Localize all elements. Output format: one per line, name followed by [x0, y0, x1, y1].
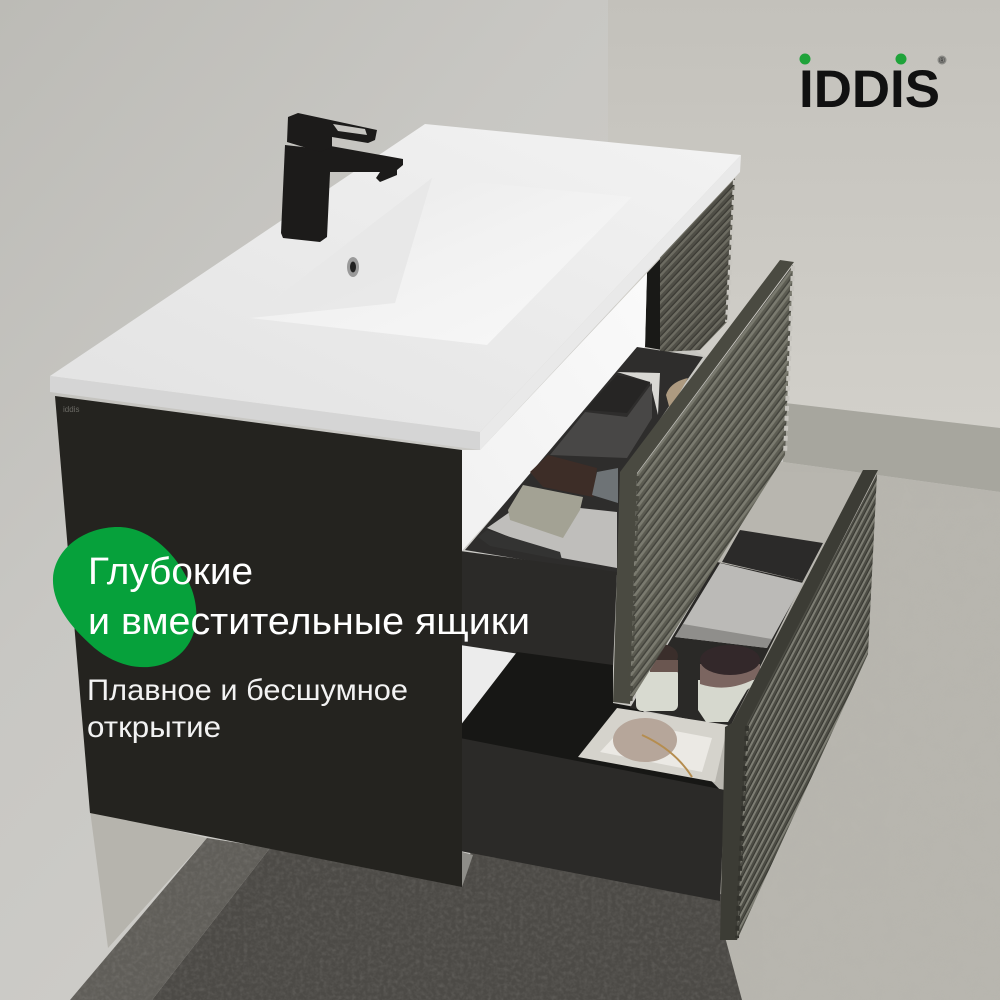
- dark item: [478, 530, 562, 560]
- white towel: [487, 505, 617, 568]
- drain: [347, 257, 359, 277]
- registered mark: [938, 56, 946, 65]
- basin left wall: [250, 178, 432, 318]
- top drawer ribbed front: [613, 260, 794, 704]
- dark floor texture: [70, 838, 742, 1000]
- countertop surface: [50, 124, 741, 432]
- ribbed surface: [660, 178, 735, 352]
- bottom drawer side: [460, 738, 725, 901]
- drawer interior: [465, 347, 703, 575]
- scalloped left edge: [737, 726, 747, 938]
- floor stone texture: [700, 462, 1000, 1000]
- ribbed surface: [630, 265, 793, 702]
- faucet handle: [287, 113, 377, 152]
- tray inner: [600, 722, 712, 772]
- bottom drawer ribbed front: [720, 470, 878, 940]
- string: [642, 735, 692, 777]
- wall shadow under cabinet: [90, 810, 207, 948]
- front edge: [720, 470, 878, 940]
- green dot left: [800, 54, 810, 64]
- ceramic washbasin: [50, 124, 741, 450]
- bin opening: [585, 375, 650, 413]
- black faucet: [281, 113, 403, 242]
- subheading line 1: Плавное и бесшумное: [87, 674, 408, 707]
- heading line 1: Глубокие: [88, 551, 253, 593]
- logo: [799, 54, 946, 119]
- left wall: [0, 0, 609, 1000]
- wordmark: IDDIS: [799, 60, 940, 119]
- top drawer side: [460, 551, 617, 668]
- green blob: [53, 527, 196, 667]
- towel band: [675, 624, 772, 648]
- tray: [578, 708, 728, 782]
- faucet spout: [325, 145, 403, 182]
- black post: [645, 257, 662, 350]
- light stone floor: [700, 462, 1000, 1000]
- bottom drawer contents: [460, 530, 823, 800]
- top drawer contents: [465, 347, 703, 575]
- front edge: [613, 260, 794, 704]
- scalloped right edge: [785, 266, 793, 455]
- inner dark space: [630, 562, 803, 727]
- subheading: [87, 674, 408, 744]
- small brand mark on cabinet: iddis: [63, 405, 79, 414]
- skirting stone: [70, 838, 270, 1000]
- heading: [88, 551, 530, 643]
- grey towel: [675, 563, 803, 648]
- countertop right edge: [480, 155, 741, 450]
- heading line 2: и вместительные ящики: [88, 601, 530, 643]
- white inner cabinet band: [460, 273, 647, 553]
- drawer interior: [460, 652, 730, 800]
- glass jar: [508, 485, 583, 538]
- grey cloth: [592, 468, 618, 503]
- right cup: [698, 645, 760, 722]
- dark storage bin: [550, 383, 652, 458]
- registered mark: ®: [939, 56, 945, 65]
- left cup: [636, 644, 678, 711]
- scalloped left edge: [630, 476, 637, 702]
- cabinet metal foot: [462, 852, 473, 887]
- faucet body: [281, 145, 330, 242]
- right wall: [608, 0, 1000, 428]
- cabinet side panel: [55, 396, 462, 887]
- dark floor under cabinet: [152, 845, 742, 1000]
- ribbed surface: [737, 474, 877, 940]
- subheading line 2: открытие: [87, 711, 221, 744]
- basin: [250, 178, 632, 345]
- pumice stone: [613, 718, 677, 762]
- green dot right: [896, 54, 906, 64]
- stone plinth step: [783, 403, 1000, 492]
- scalloped edges: [727, 180, 735, 322]
- countertop front edge: [50, 376, 480, 450]
- stone: [666, 378, 688, 410]
- upper ribbed cabinet front: [645, 178, 735, 352]
- white box: [617, 372, 660, 415]
- rear panel: [722, 530, 823, 581]
- white lower gap: [460, 640, 517, 726]
- brown brush: [530, 455, 597, 497]
